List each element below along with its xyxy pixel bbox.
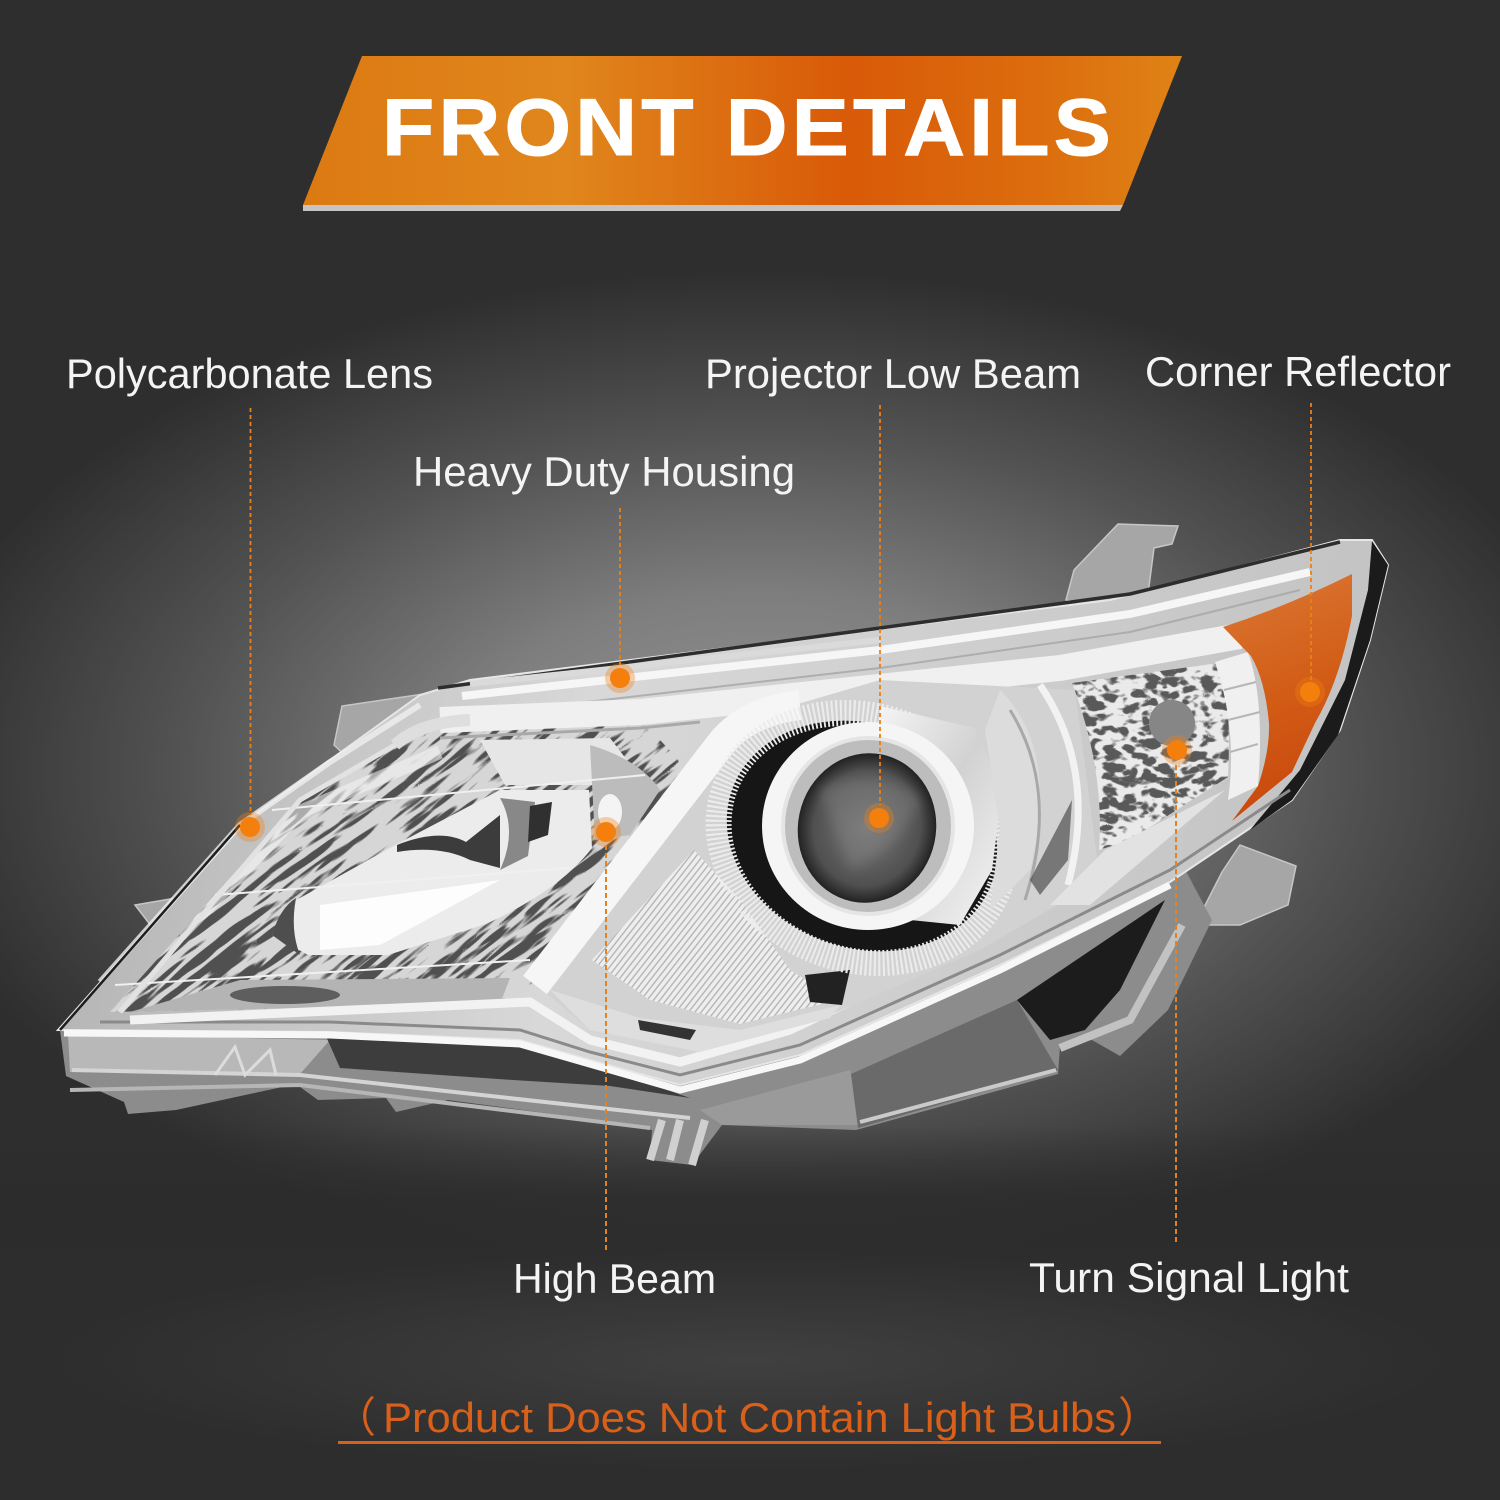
- footnote: [334, 1384, 1161, 1445]
- ribbed reflector panel: [592, 850, 838, 1024]
- callout: heavy duty housing: [413, 448, 795, 693]
- callout: projector low beam: Projector Low Beam: [705, 350, 1081, 397]
- left high beam chamber: [110, 725, 679, 1012]
- title: FRONT DETAILS: [382, 83, 1115, 173]
- footnote: ）: [1118, 1384, 1160, 1445]
- callout: turn signal light: Turn Signal Light: [1029, 1254, 1349, 1301]
- callout: high beam: [513, 817, 716, 1302]
- callout: corner reflector: [1145, 348, 1451, 707]
- callout: polycarbonate lens: [66, 350, 433, 842]
- chrome diagonal bar: [535, 705, 800, 985]
- center chamber: [535, 673, 1100, 1052]
- callout: projector low beam: [705, 350, 1081, 833]
- amber corner reflector: [1223, 574, 1352, 821]
- rear mounting brackets: [135, 524, 1296, 935]
- lower housing: [60, 860, 1212, 1165]
- right signal chamber: [1050, 652, 1260, 905]
- lens body: [58, 540, 1388, 1090]
- chrome frame: [120, 636, 1240, 1062]
- footnote: Product Does Not Contain Light Bulbs: [383, 1394, 1116, 1441]
- callout: polycarbonate lens: Polycarbonate Lens: [66, 350, 433, 397]
- projector lens: [784, 740, 950, 916]
- title banner: [303, 56, 1182, 211]
- callout: heavy duty housing: Heavy Duty Housing: [413, 448, 795, 495]
- footnote: （: [334, 1384, 376, 1445]
- callout: turn signal light: [1029, 735, 1349, 1301]
- headlight assembly: [56, 523, 1389, 1166]
- projector barrel: [860, 706, 1002, 925]
- ribbed collar: [694, 684, 1030, 988]
- reflector bowl: [272, 790, 592, 955]
- callout: corner reflector: Corner Reflector: [1145, 348, 1451, 395]
- projector ring: [762, 722, 974, 930]
- callout: high beam: High Beam: [513, 1255, 716, 1302]
